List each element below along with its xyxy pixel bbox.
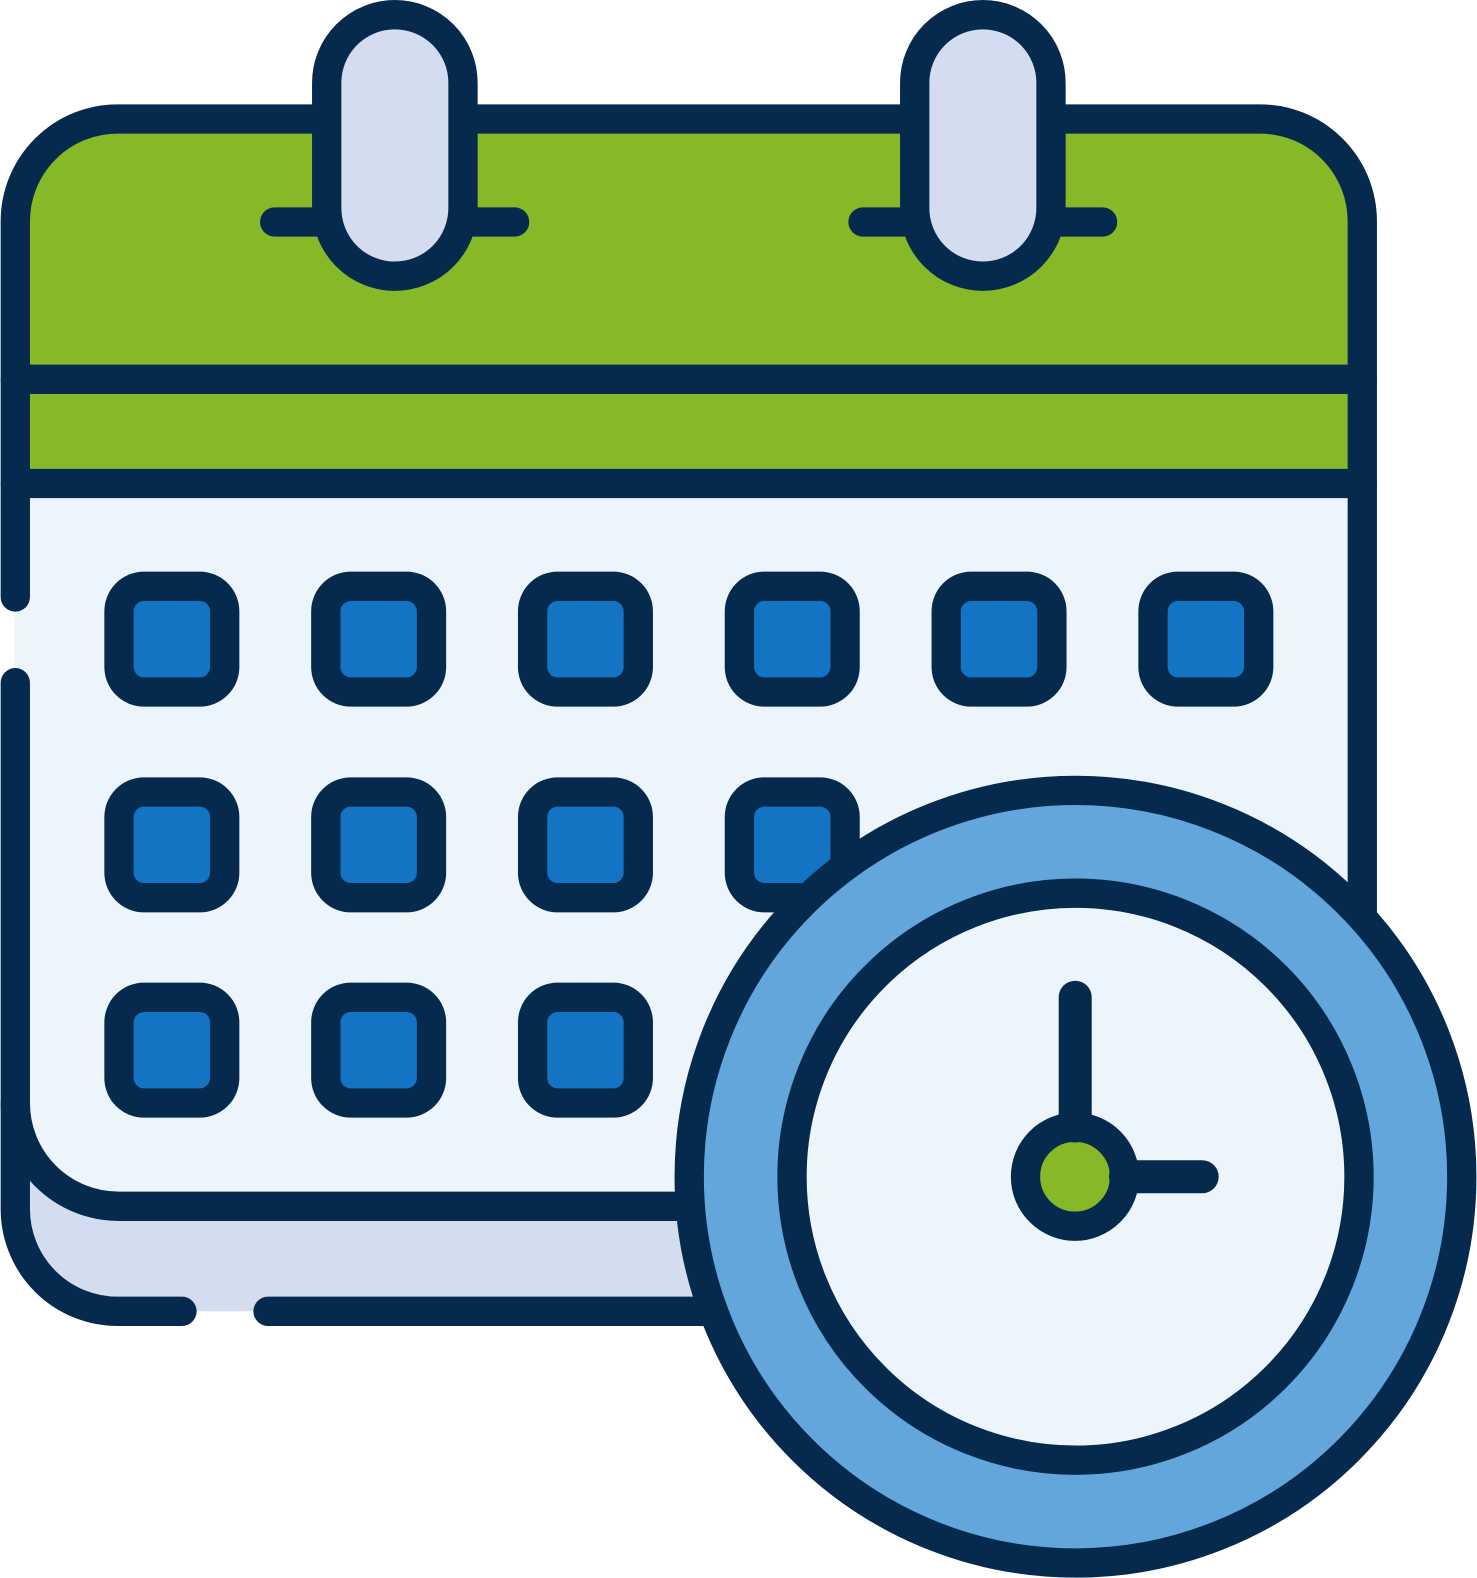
clock hands bbox=[1075, 997, 1202, 1177]
binding ring left bbox=[327, 15, 463, 276]
calendar outline bbox=[15, 119, 1362, 1311]
clock bbox=[689, 790, 1462, 1563]
calendar back sheet bbox=[15, 1100, 760, 1311]
clock outer ring bbox=[689, 790, 1462, 1563]
binding ticks bbox=[275, 207, 1103, 237]
clock hub bbox=[1026, 1127, 1124, 1226]
clock face bbox=[792, 893, 1359, 1460]
date squares bbox=[119, 586, 1259, 1103]
calendar page bbox=[14, 484, 1362, 1206]
binding ring right bbox=[915, 15, 1051, 276]
calendar header bbox=[15, 119, 1362, 484]
